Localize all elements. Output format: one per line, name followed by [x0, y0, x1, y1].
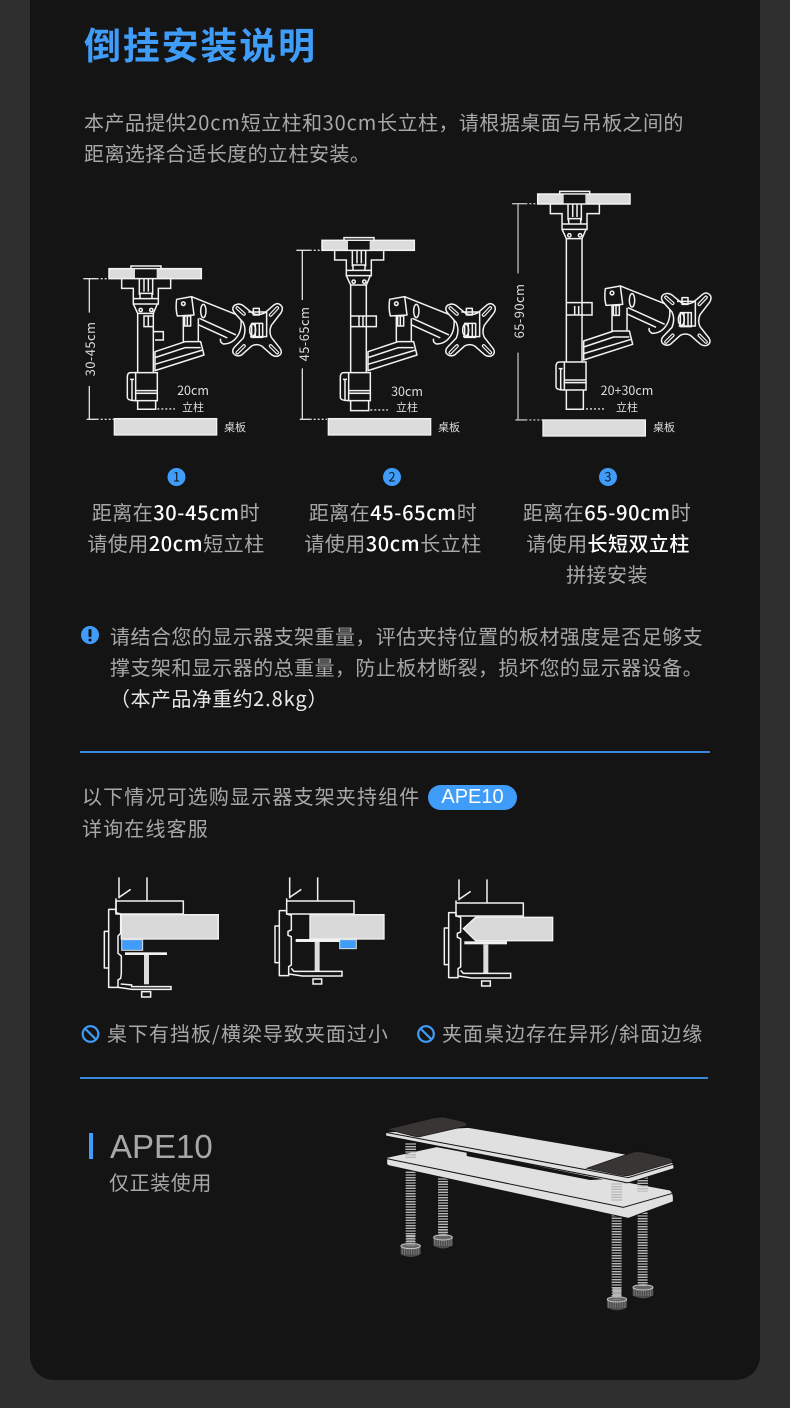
label: 65-90cm: 65-90cm	[509, 284, 528, 338]
lower plate	[387, 1147, 673, 1218]
step 1 text: 距离在30-45cm时	[92, 497, 260, 526]
intro text	[84, 107, 684, 167]
badge: APE10: APE10	[441, 786, 504, 808]
badge: APE10	[428, 785, 517, 810]
label: post 3: 立柱	[616, 399, 638, 415]
label: 45-65cm: 45-65cm	[294, 307, 313, 361]
divider	[80, 1077, 708, 1078]
label: post 2: 立柱	[396, 399, 418, 415]
APE10 product illustration	[386, 1117, 674, 1310]
case caption 1: 桌下有挡板/横梁导致夹面过小	[107, 1018, 389, 1047]
label: desk 1: 桌板	[224, 419, 246, 435]
label: desk 3: 桌板	[653, 419, 675, 435]
label: 20cm post: 20cm	[177, 380, 209, 399]
diagram 1: 20cm post	[83, 266, 282, 435]
step badge 3: 3	[605, 466, 612, 486]
step 2 text: 距离在45-65cm时	[309, 497, 477, 526]
step badge 3	[599, 466, 617, 486]
optional parts text: 以下情况可选购显示器支架夹持组件	[82, 781, 420, 810]
diagram 3: 20+30cm post	[512, 191, 711, 436]
step 3 text line 2: 请使用长短双立柱	[526, 528, 690, 557]
lower screw threads	[411, 1146, 643, 1298]
step 3 text line 3: 拼接安装	[566, 559, 648, 588]
diagram 2: 30cm post	[296, 238, 495, 435]
pads	[387, 1117, 467, 1137]
clamp case 3	[444, 879, 553, 986]
notice text: 撑支架和显示器的总重量，防止板材断裂，损坏您的显示器设备。	[110, 652, 703, 681]
label: 30-45cm: 30-45cm	[80, 322, 99, 376]
step badge 1: 1	[173, 466, 180, 486]
icon: notice	[81, 626, 99, 644]
title: 倒挂安装说明	[84, 16, 317, 70]
icon: prohibited 1	[83, 1026, 98, 1042]
label: desk 2: 桌板	[438, 419, 460, 435]
product note: 仅正装使用	[109, 1167, 212, 1196]
label: 20+30cm post: 20+30cm	[601, 380, 653, 399]
icon: prohibited 2	[418, 1026, 434, 1042]
step 1 text line 2: 请使用20cm短立柱	[87, 528, 265, 557]
clamp case 2	[275, 877, 384, 984]
knobs	[401, 1237, 653, 1310]
case caption 2: 夹面桌边存在异形/斜面边缘	[442, 1018, 703, 1047]
upper screw threads	[411, 1143, 643, 1201]
notice text: （本产品净重约2.8kg）	[110, 683, 328, 712]
notice text	[110, 621, 703, 712]
intro text: 距离选择合适长度的立柱安装。	[84, 138, 370, 167]
divider	[80, 751, 710, 753]
contact text: 详询在线客服	[82, 813, 209, 842]
step badge 2: 2	[389, 466, 396, 486]
clamp case 1	[104, 877, 218, 997]
step badge 1	[168, 466, 186, 486]
step badge 2	[383, 466, 401, 486]
step 2 text line 2: 请使用30cm长立柱	[304, 528, 482, 557]
label: post 1: 立柱	[182, 399, 204, 415]
top plate	[386, 1127, 674, 1183]
accent bar	[89, 1133, 93, 1159]
label: 30cm post: 30cm	[391, 381, 423, 400]
intro text: 本产品提供20cm短立柱和30cm长立柱，请根据桌面与吊板之间的	[84, 107, 684, 136]
product name: APE10	[110, 1128, 213, 1165]
step 3 text: 距离在65-90cm时	[523, 497, 691, 526]
notice text: 请结合您的显示器支架重量，评估夹持位置的板材强度是否足够支	[110, 621, 703, 650]
